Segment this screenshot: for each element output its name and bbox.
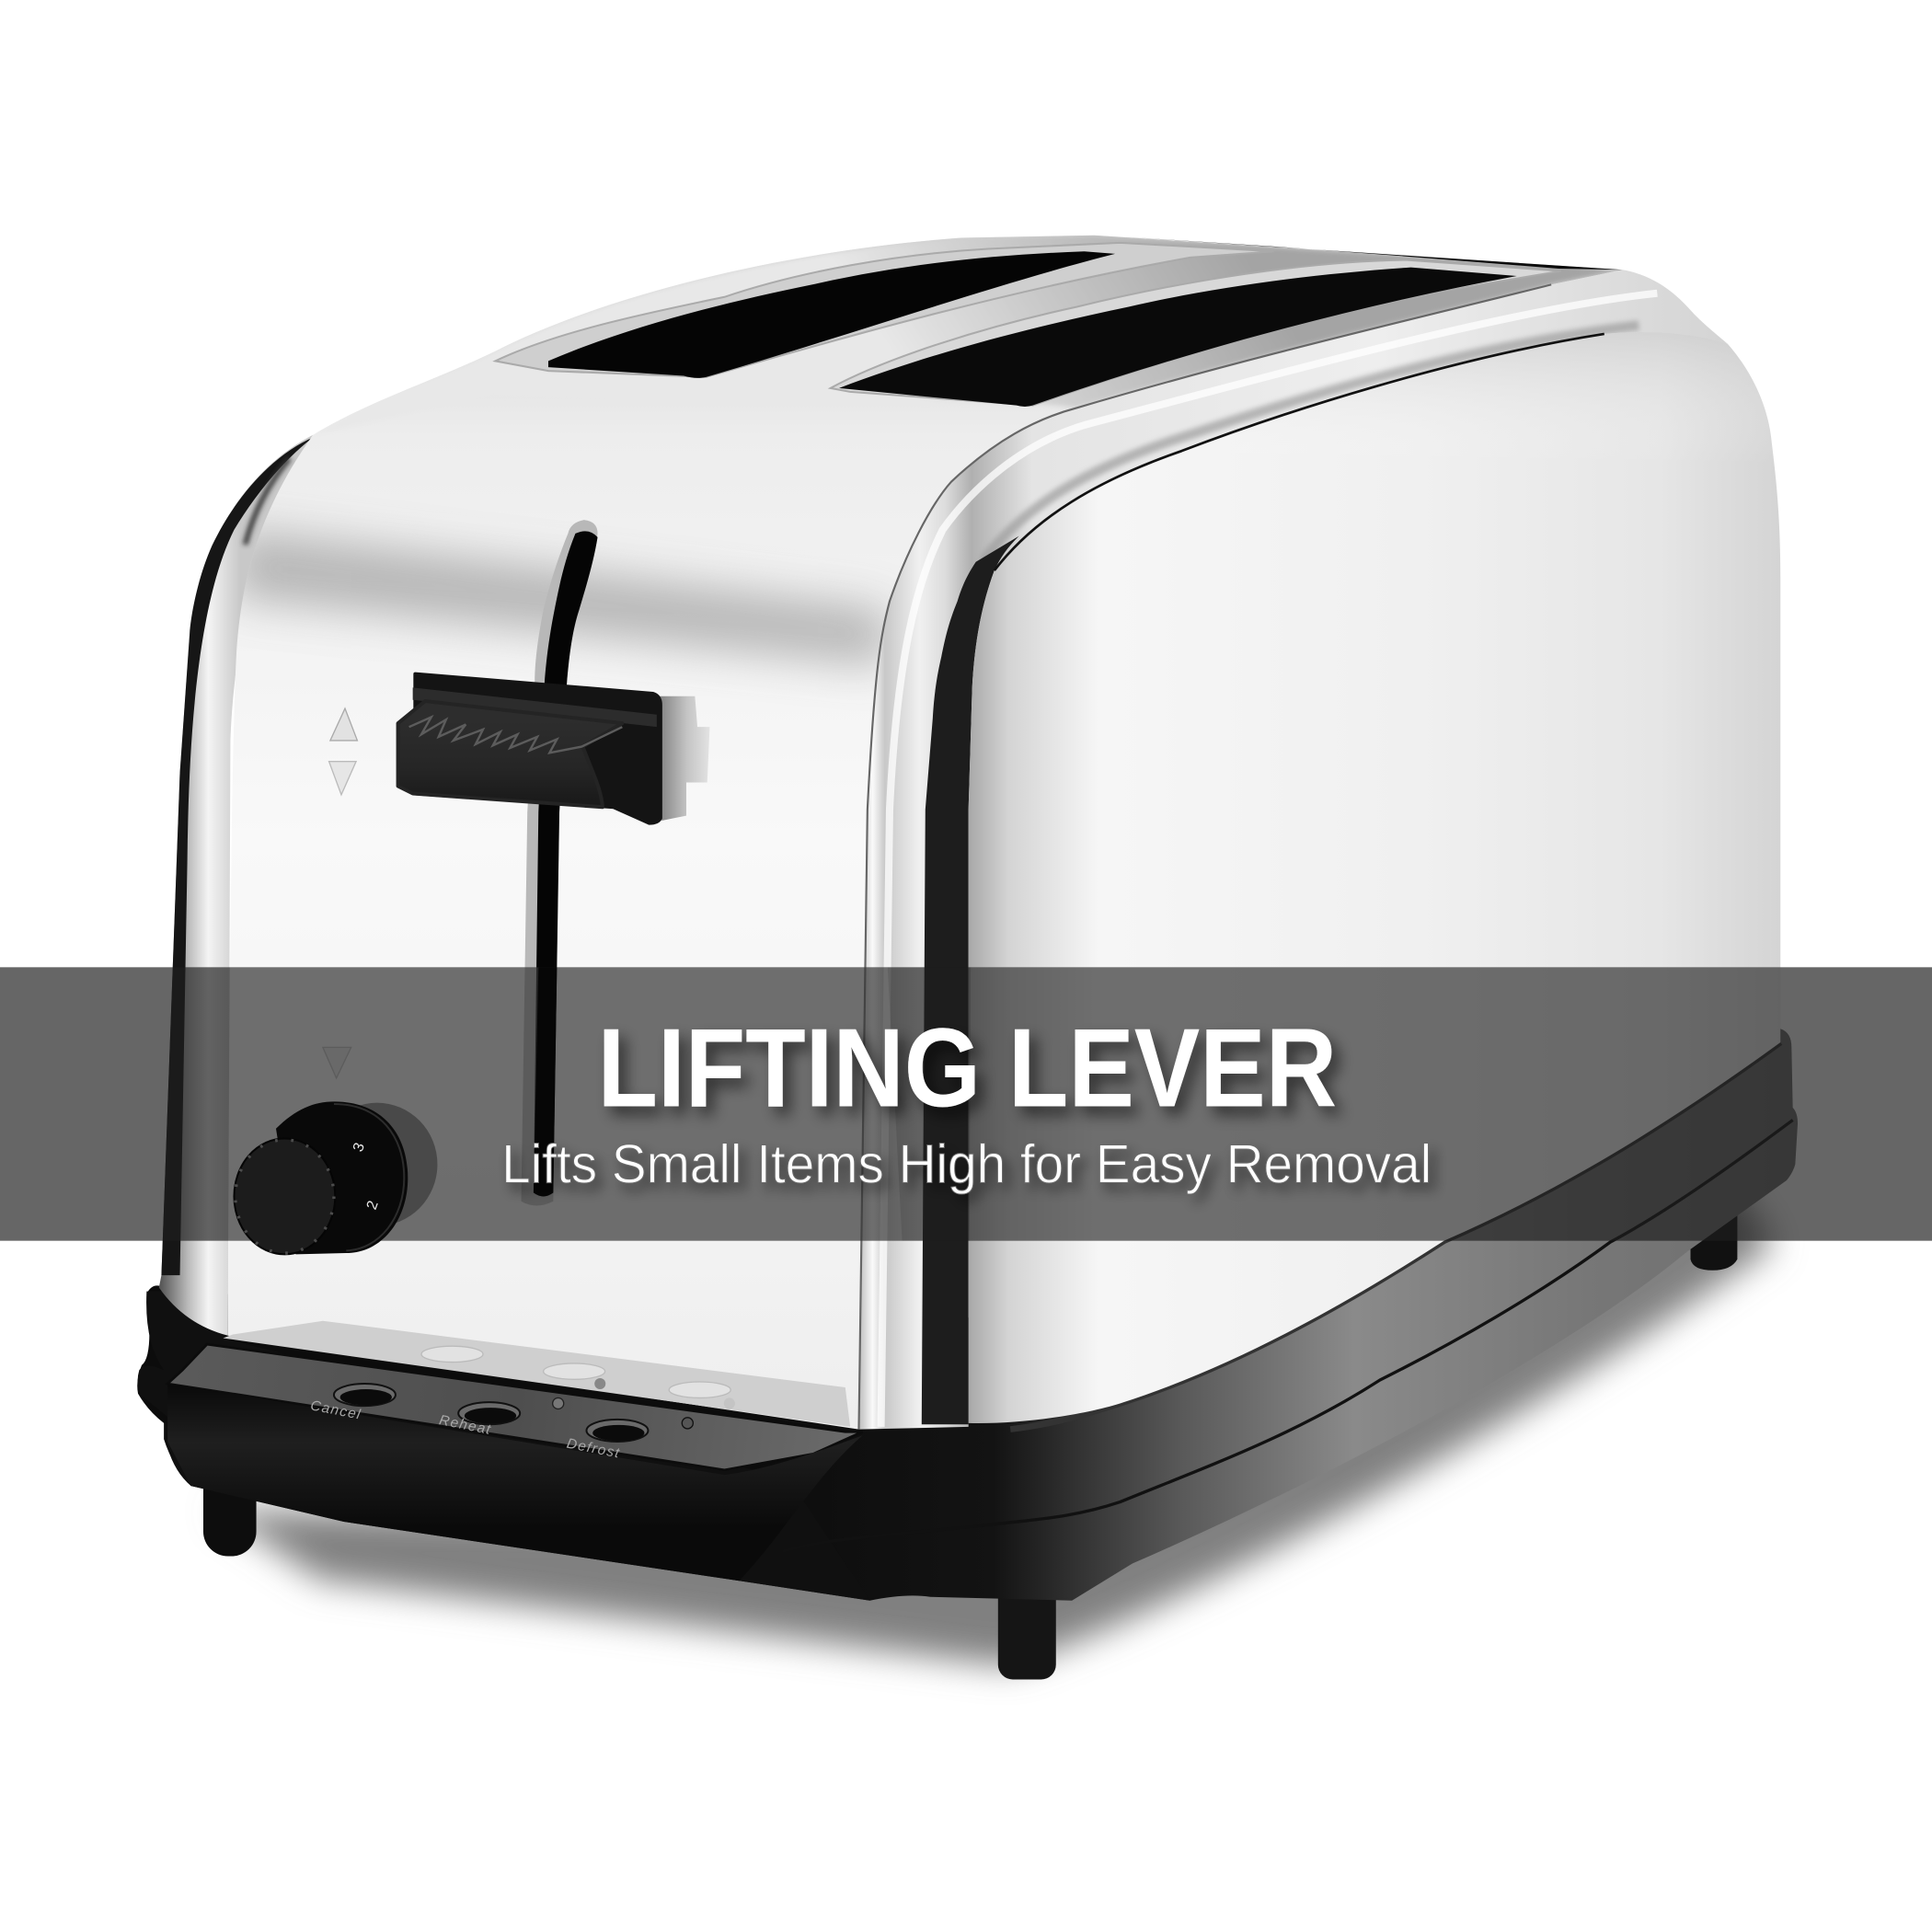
slot two opening: [839, 268, 1517, 407]
front panel reflection of controls: [223, 1321, 850, 1427]
dial body: [276, 1101, 408, 1254]
defrost button: [587, 1420, 648, 1442]
defrost label: Defrost: [565, 1436, 622, 1462]
dial pointer triangle: [323, 1047, 351, 1078]
indicator lights: [553, 1397, 693, 1429]
lever ghost reflection: [660, 696, 709, 821]
rubber feet: [203, 1213, 1737, 1679]
lever back plate: [415, 674, 661, 823]
browning dial: [234, 1101, 408, 1254]
base seam line: [782, 1120, 1793, 1551]
infographic canvas: [0, 236, 1932, 1688]
slot one opening: [548, 251, 1115, 378]
lever handle: [398, 674, 709, 823]
lever front block: [398, 701, 622, 807]
reheat button: [458, 1402, 520, 1424]
long side panel: [969, 332, 1780, 1423]
subtitle: Lifts Small Items High for Easy Removal: [501, 1135, 1432, 1195]
browning dial: 2: [363, 1199, 382, 1212]
toast slots: [495, 236, 1623, 407]
rear edge: [1120, 236, 1623, 270]
cancel label: Cancel: [309, 1397, 362, 1423]
lever grip ribs: [409, 717, 622, 753]
cancel button: [334, 1384, 396, 1406]
title: LIFTING LEVER: [598, 1006, 1337, 1131]
tray front wall: [167, 1384, 863, 1581]
direction triangles: [329, 708, 357, 795]
toaster illustration: [137, 236, 1798, 1679]
dial numbers: 3: [350, 1141, 368, 1154]
floor shadow: [215, 1170, 1775, 1666]
front and top metal face: [228, 236, 1623, 1430]
control tray: [167, 1344, 863, 1581]
dial face: [234, 1139, 335, 1254]
dial reflection: [316, 1103, 437, 1226]
grey reflection band: [234, 530, 887, 665]
dark bevel stripe: [922, 536, 1019, 1424]
translucent caption band: [0, 967, 1932, 1241]
reheat label: Reheat: [438, 1412, 493, 1438]
slot two rim: [831, 260, 1561, 406]
chrome bevel: [858, 270, 1728, 1430]
tray top surface: [167, 1344, 863, 1470]
slot one rim: [495, 243, 1274, 377]
black plastic base: [137, 1029, 1798, 1601]
lever slot with chrome edge: [522, 520, 598, 1205]
lever slot through the band: [534, 967, 557, 1196]
left chrome side edge: [159, 435, 313, 1336]
